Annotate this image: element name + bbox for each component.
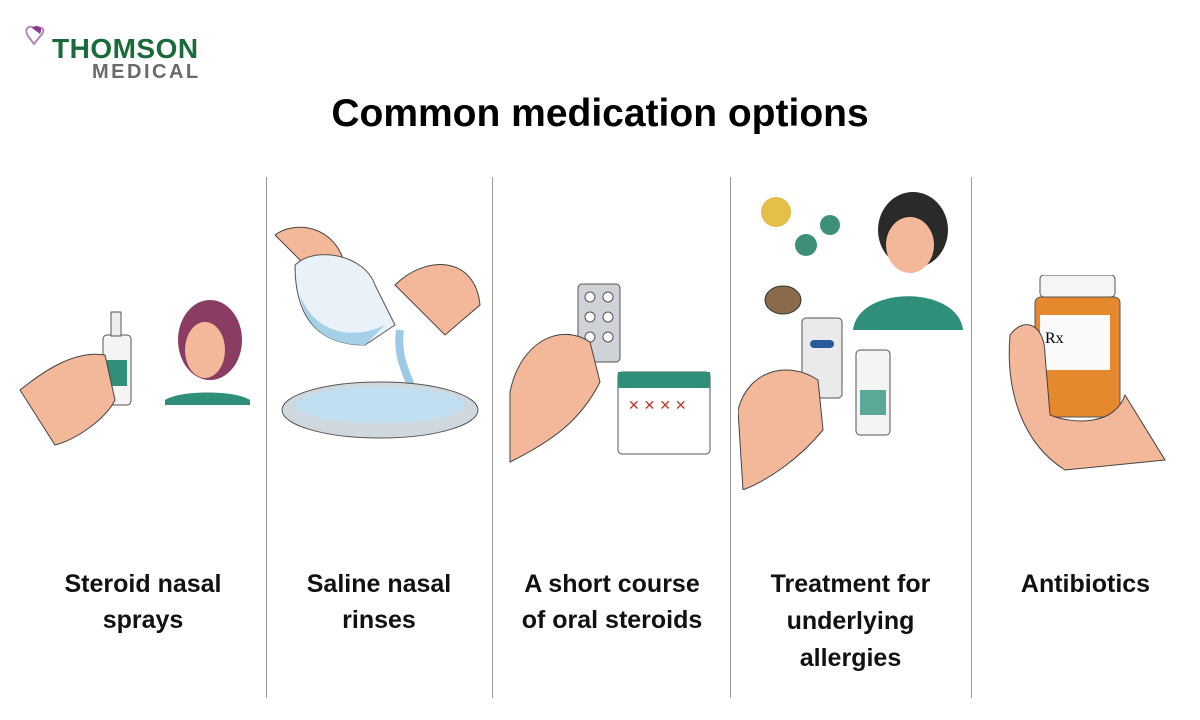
title: Common medication options — [331, 92, 869, 135]
label: oral steroids: A short course — [524, 570, 700, 598]
illustration: antibiotics — [1008, 275, 1166, 470]
icon: heart logo — [25, 26, 44, 46]
label: allergies — [770, 570, 930, 672]
label: antibiotics: Antibiotics — [1021, 570, 1150, 598]
label: steroid sprays — [64, 570, 222, 634]
logo — [25, 26, 201, 83]
logo: MEDICAL — [92, 61, 201, 83]
label: saline rinses: rinses — [342, 606, 416, 634]
label: saline rinses: Saline nasal — [307, 570, 451, 598]
label: steroid sprays: Steroid nasal — [64, 570, 222, 598]
label: saline rinses — [307, 570, 451, 634]
illustration: oral steroids: ✕ ✕ ✕ ✕ — [628, 397, 687, 413]
illustration: saline rinse — [275, 226, 480, 438]
label: steroid sprays: sprays — [103, 606, 183, 634]
label: allergies: underlying — [787, 607, 914, 635]
illustration: oral steroids — [510, 284, 710, 463]
illustration: nasal spray — [19, 300, 250, 446]
label: allergies: allergies — [800, 644, 901, 672]
label: oral steroids — [522, 570, 702, 634]
label: oral steroids: of oral steroids — [522, 606, 702, 634]
illustration: allergies — [738, 192, 963, 490]
label: allergies: Treatment for — [771, 570, 930, 598]
illustration: antibiotics: Rx — [1045, 330, 1064, 347]
logo: THOMSON — [52, 33, 199, 64]
